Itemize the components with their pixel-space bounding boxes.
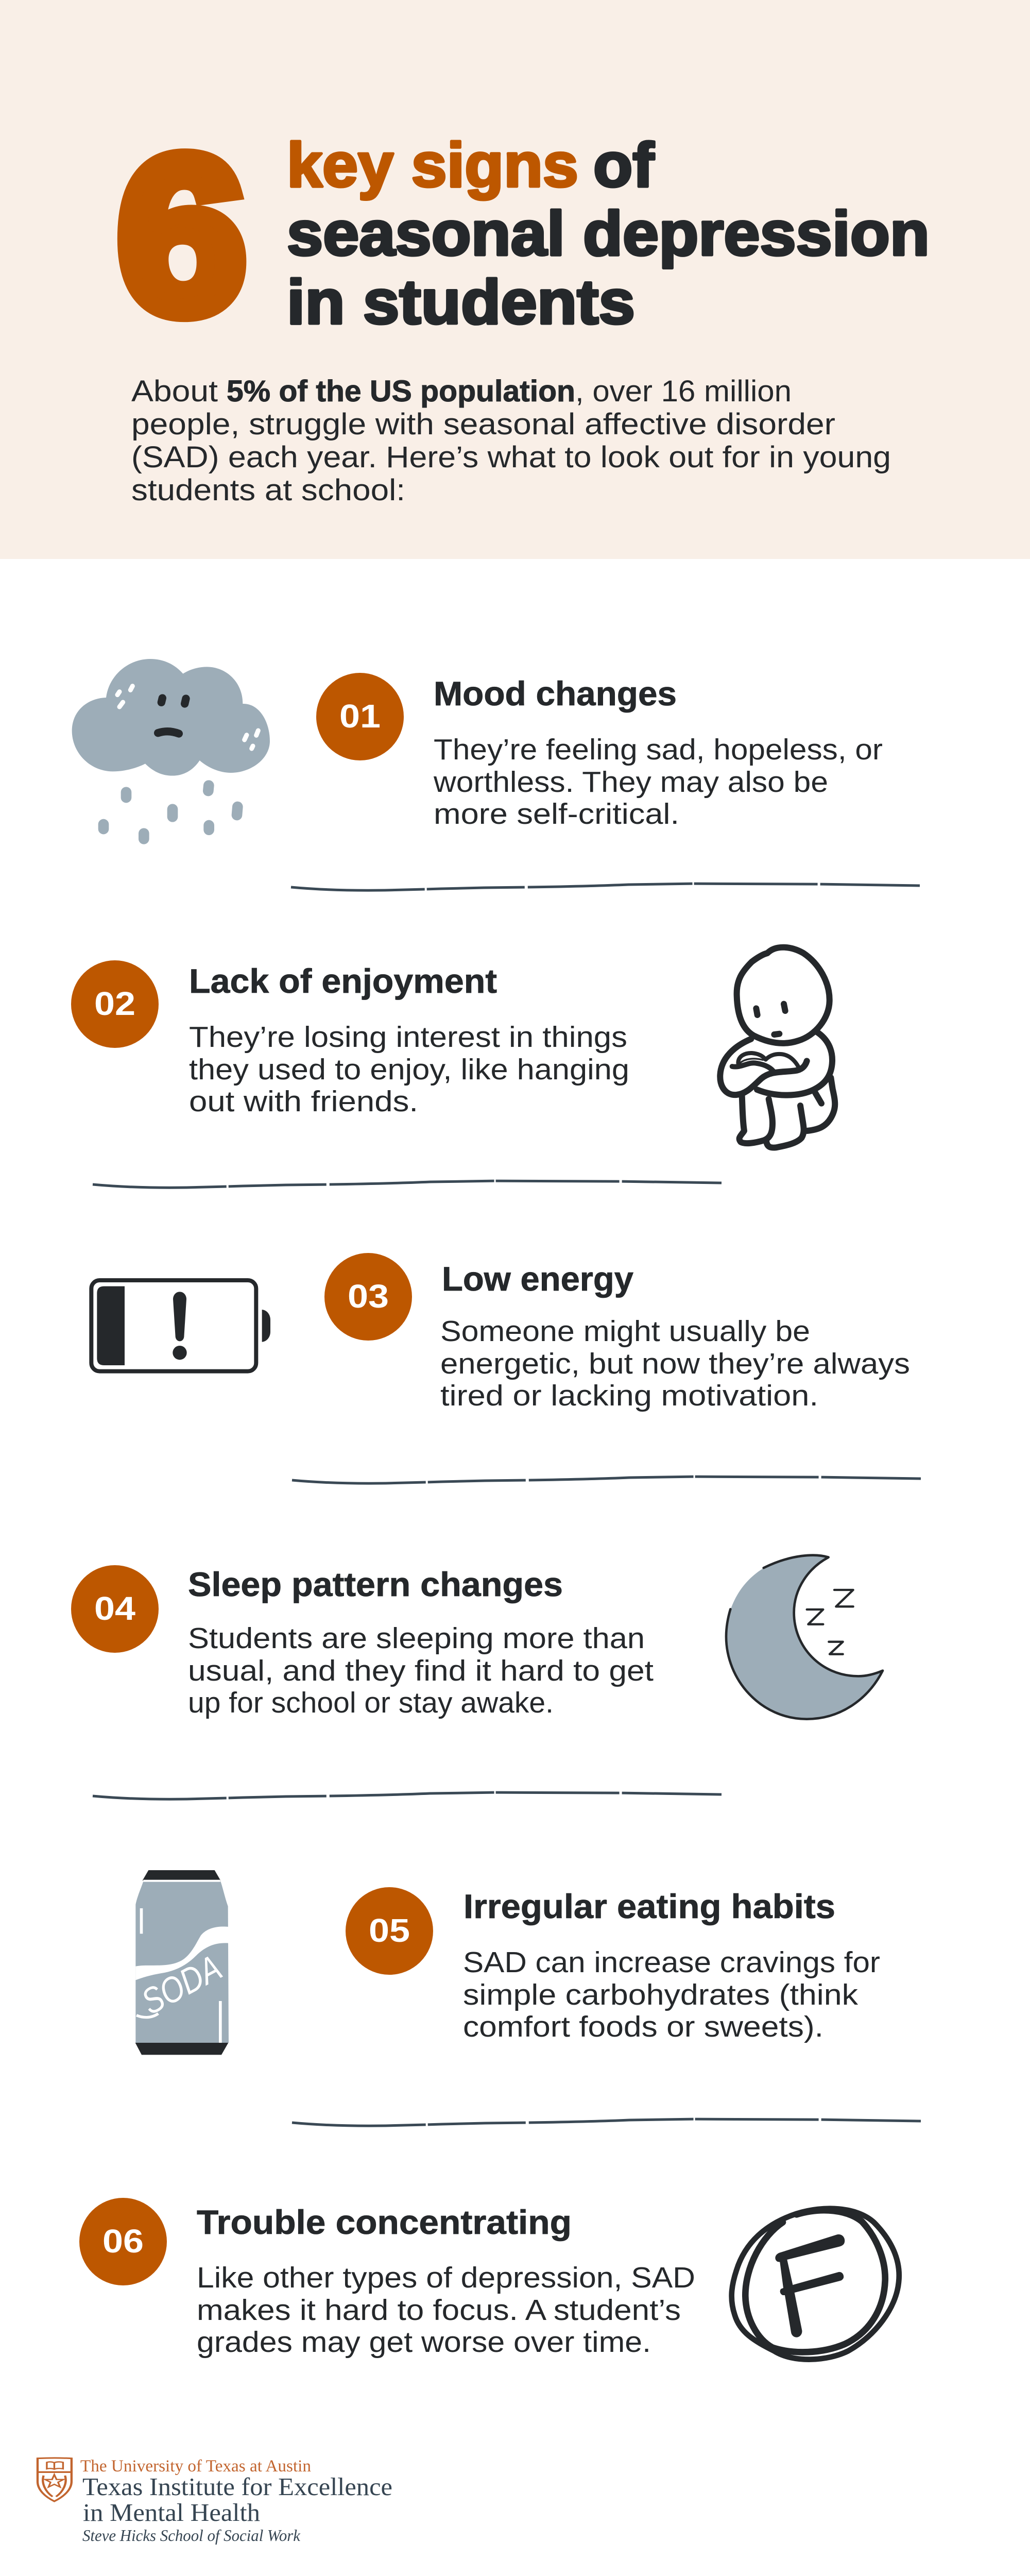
- footer logo: [38, 2457, 392, 2545]
- institution name: Texas Institute for Excellence: [82, 2472, 392, 2501]
- panel: header: [0, 0, 1030, 559]
- icon: circled letter F: [732, 2209, 899, 2360]
- title: in students: [287, 267, 635, 337]
- badge 04: [71, 1565, 159, 1653]
- body text: [188, 1622, 654, 1719]
- icon: university shield: [38, 2458, 72, 2501]
- body text: Students are sleeping more than: [188, 1622, 645, 1655]
- title: of: [593, 130, 654, 200]
- body text: [197, 2261, 695, 2359]
- intro text: About: [131, 375, 218, 408]
- institution name: Steve Hicks School of Social Work: [82, 2526, 301, 2545]
- institution name: The University of Texas at Austin: [80, 2457, 311, 2476]
- title: key signs: [287, 130, 578, 200]
- body text: out with friends.: [189, 1085, 418, 1118]
- number badge 01: [316, 673, 404, 760]
- icon: crescent moon with zzz: [726, 1555, 883, 1719]
- badge 06: [79, 2198, 167, 2285]
- body text: They’re feeling sad, hopeless, or: [434, 733, 883, 766]
- body text: [463, 1946, 880, 2043]
- body text: tired or lacking motivation.: [440, 1379, 818, 1412]
- item 1: mood changes: [72, 659, 883, 839]
- body text: Like other types of depression, SAD: [197, 2261, 695, 2294]
- body text: usual, and they find it hard to get: [188, 1654, 654, 1687]
- icon: soda can: SODA: [135, 1947, 228, 2022]
- badge 05: 05: [369, 1912, 410, 1949]
- title: [287, 130, 930, 337]
- body text: [189, 1021, 629, 1118]
- badge 03: 03: [348, 1278, 389, 1315]
- item 2: lack of enjoyment: [71, 947, 835, 1148]
- title: seasonal depression: [287, 198, 930, 268]
- body text: Someone might usually be: [440, 1315, 810, 1348]
- body text: grades may get worse over time.: [197, 2326, 651, 2359]
- heading: Trouble concentrating: [197, 2203, 572, 2241]
- intro text: , over 16 million: [575, 375, 792, 408]
- badge 02: [71, 960, 159, 1048]
- icon: soda can: [135, 1870, 229, 2055]
- badge 04: 04: [94, 1590, 135, 1627]
- intro text: (SAD) each year. Here’s what to look out for in young: [131, 440, 891, 474]
- body text: [440, 1315, 910, 1412]
- icon: hunched figure: [720, 947, 835, 1148]
- body text: up for school or stay awake.: [188, 1686, 554, 1719]
- badge 03: [324, 1253, 412, 1341]
- number badge 01: 01: [339, 698, 381, 735]
- badge 02: 02: [94, 985, 135, 1022]
- institution name: [80, 2457, 392, 2545]
- body text: they used to enjoy, like hanging: [189, 1053, 629, 1086]
- intro text: 5% of the US population: [227, 375, 575, 408]
- icon: sad rain cloud: [72, 659, 270, 839]
- heading: Low energy: [442, 1260, 633, 1298]
- icon: low battery: [91, 1280, 270, 1371]
- heading: Lack of enjoyment: [189, 962, 497, 1000]
- item 5: irregular eating habits: [135, 1870, 880, 2055]
- body text: worthless. They may also be: [433, 766, 828, 799]
- body text: SAD can increase cravings for: [463, 1946, 880, 1979]
- institution name: in Mental Health: [83, 2498, 260, 2527]
- intro text: students at school:: [131, 473, 405, 507]
- badge 06: 06: [102, 2223, 144, 2260]
- heading: Sleep pattern changes: [188, 1565, 563, 1603]
- body text: simple carbohydrates (think: [463, 1978, 859, 2011]
- intro text: people, struggle with seasonal affective disorder: [131, 408, 835, 441]
- heading: Mood changes: [434, 674, 677, 713]
- heading: Irregular eating habits: [464, 1887, 835, 1925]
- body text: comfort foods or sweets).: [463, 2010, 823, 2043]
- body text: They’re losing interest in things: [189, 1021, 627, 1054]
- intro text: [131, 375, 891, 507]
- body text: makes it hard to focus. A student’s: [197, 2294, 681, 2327]
- item 4: sleep pattern changes: [71, 1555, 883, 1719]
- body text: [433, 733, 883, 831]
- body text: energetic, but now they’re always: [440, 1347, 910, 1380]
- badge 05: [346, 1887, 433, 1975]
- big number 6: 6: [118, 112, 246, 358]
- body text: more self-critical.: [434, 798, 679, 831]
- item 6: trouble concentrating: [79, 2198, 899, 2360]
- item 3: low energy: [91, 1253, 910, 1412]
